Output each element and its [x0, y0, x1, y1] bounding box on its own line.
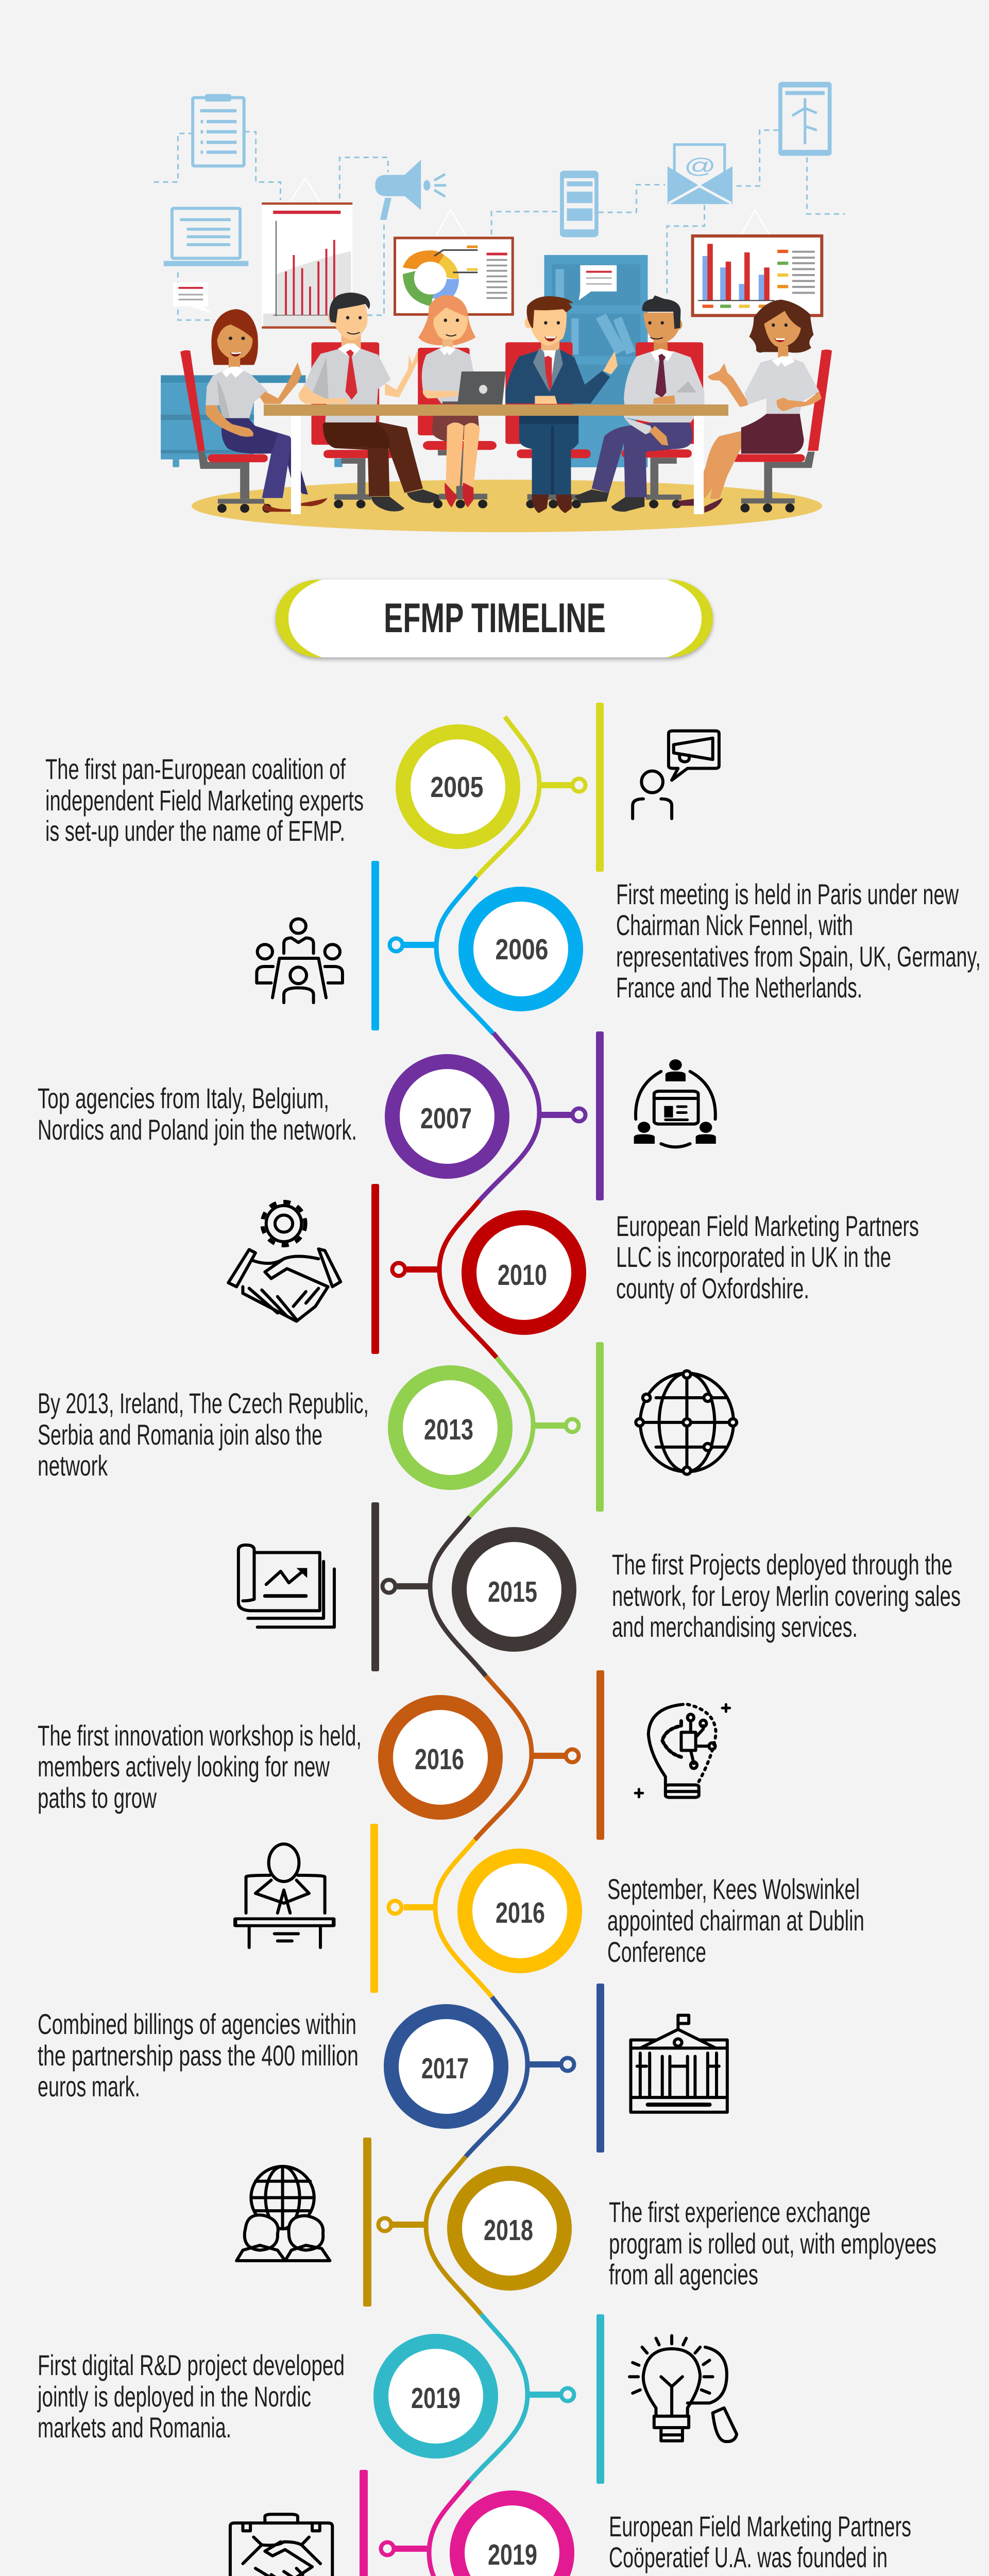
- text: 2017: the partnership pass the 400 million: [38, 2039, 359, 2072]
- laptop: [442, 371, 506, 404]
- text: 2018: The first experience exchange: [609, 2196, 871, 2228]
- text: 2015: [612, 1548, 961, 1643]
- chair: woman with orange hair: [418, 348, 497, 509]
- person: woman on left: [206, 309, 328, 512]
- text: 2016 chairman: Conference: [607, 1936, 706, 1968]
- text: 2019 R&D: First digital R&D project developed: [38, 2349, 345, 2381]
- icon: email envelope: [668, 145, 732, 204]
- milestone 2007: 2007: [420, 1102, 472, 1135]
- icon: innovation bulb: [635, 1704, 730, 1798]
- text: 2017: euros mark.: [38, 2070, 140, 2103]
- milestone 2019 cooperative: 2019: [488, 2538, 537, 2571]
- text: 2007: Top agencies from Italy, Belgium,: [38, 1082, 329, 1114]
- text: 2013: Serbia and Romania join also the: [38, 1418, 322, 1451]
- text: 2013: [38, 1387, 369, 1482]
- text: 2016 chairman: appointed chairman at Dublin: [607, 1904, 864, 1937]
- milestone 2006: 2006: [496, 933, 548, 966]
- text: 2019 R&D: markets and Romania.: [38, 2411, 231, 2444]
- bookshelf: [544, 255, 647, 467]
- milestone 2016 chairman: [233, 1824, 864, 1997]
- yellow floor ellipse: [192, 480, 822, 532]
- chair: man in suit: [505, 342, 590, 509]
- text: 2016 workshop: [38, 1719, 362, 1814]
- text: 2016 chairman: September, Kees Wolswinkel: [607, 1873, 860, 1905]
- text: 2018: from all agencies: [609, 2258, 758, 2291]
- icon: laptop: [164, 208, 248, 266]
- text: 2017: Combined billings of agencies within: [38, 2008, 356, 2040]
- text: 2005: is set-up under the name of EFMP.: [45, 815, 345, 847]
- icon: clipboard: [193, 94, 244, 166]
- chair: man with dark tie: [622, 342, 703, 509]
- icon: online team: [634, 1059, 716, 1147]
- hero backdrop: icons and charts: [154, 82, 845, 467]
- milestone 2015: [238, 1502, 961, 1676]
- text: 2016 workshop: The first innovation workshop is held,: [38, 1719, 362, 1752]
- text: 2016 workshop: members actively looking for new: [38, 1750, 330, 1783]
- icon: briefcase handshake: [230, 2514, 332, 2576]
- milestone 2005: [45, 703, 719, 877]
- milestone 2007: [38, 1031, 716, 1200]
- text: 2007: [38, 1082, 357, 1146]
- icon: people under globe: [236, 2166, 330, 2261]
- chart board 1: [262, 202, 352, 329]
- person: man with red tie: [299, 293, 442, 512]
- right group of people: [505, 295, 832, 513]
- person: man with dark tie: [574, 295, 704, 512]
- text: 2017: [38, 2008, 359, 2103]
- text: 2005: The first pan-European coalition of: [45, 753, 346, 785]
- person: woman on right: [676, 300, 822, 513]
- milestone 2018: [236, 2138, 936, 2314]
- milestone 2013: 2013: [424, 1413, 473, 1446]
- text: 2010: [616, 1210, 919, 1304]
- text: 2006: Chairman Nick Fennel, with: [616, 909, 853, 941]
- floating connection lines: [154, 130, 845, 320]
- title pill: [276, 580, 713, 659]
- icon: email envelope: @: [684, 154, 716, 178]
- milestone 2015: 2015: [488, 1575, 537, 1608]
- milestone 2005: 2005: [431, 771, 483, 804]
- chair: left woman: [180, 350, 271, 513]
- donut chart board: [395, 238, 513, 314]
- icon: light bulb and magnifier: [629, 2335, 737, 2442]
- text: 2006: France and The Netherlands.: [616, 971, 862, 1004]
- icon: megaphone: [375, 160, 446, 220]
- milestone 2016 chairman: 2016: [496, 1896, 545, 1929]
- text: 2013: By 2013, Ireland, The Czech Republic,: [38, 1387, 369, 1419]
- icon: phone: [560, 171, 599, 238]
- text: 2005: [45, 753, 364, 847]
- milestone 2016 workshop: 2016: [415, 1743, 464, 1776]
- title text: EFMP TIMELINE: [384, 595, 606, 641]
- person: man in navy suit: [505, 296, 618, 513]
- milestone 2019 R&D: [37, 2314, 737, 2484]
- icon: institution building: [630, 2015, 727, 2112]
- milestone 2010: [228, 1184, 919, 1358]
- filing cabinet: [161, 375, 343, 467]
- chair: right woman: [732, 349, 832, 513]
- chair: man with red tie: [312, 342, 394, 509]
- icon: chairman at desk: [233, 1844, 335, 1947]
- meeting table: [264, 404, 728, 514]
- text: 2005: independent Field Marketing experts: [45, 784, 364, 817]
- milestone 2018: 2018: [484, 2214, 533, 2247]
- text: 2016 chairman: [607, 1873, 864, 1968]
- text: 2018: [609, 2196, 936, 2291]
- icon: gear and handshake: [228, 1202, 340, 1321]
- milestone 2016 workshop: [38, 1670, 730, 1840]
- speech bubbles: [173, 265, 617, 314]
- milestone 2019 cooperative: [230, 2470, 919, 2576]
- text: 2010: county of Oxfordshire.: [616, 1272, 809, 1304]
- text: 2019 R&D: [37, 2349, 345, 2444]
- hanging triangles: [291, 178, 770, 236]
- text: 2019 cooperative: [609, 2510, 919, 2576]
- text: 2006: [616, 878, 981, 1004]
- text: 2016 workshop: paths to grow: [38, 1782, 157, 1814]
- icon: meeting around table: [257, 919, 343, 1003]
- milestone 2010: 2010: [498, 1259, 547, 1292]
- text: 2019 R&D: jointly is deployed in the Nordic: [37, 2380, 311, 2413]
- milestone 2013: [38, 1342, 737, 1517]
- text: 2013: network: [38, 1449, 108, 1482]
- milestone 2017: [38, 1984, 727, 2157]
- hero illustration: team meeting: [154, 82, 845, 532]
- text: 2007: Nordics and Poland join the network.: [38, 1113, 357, 1146]
- bar chart board: [693, 236, 822, 315]
- icon: speaker with megaphone bubble: [633, 731, 719, 819]
- icon: tablet: [778, 82, 831, 156]
- left group of people: [161, 293, 506, 513]
- person: woman with orange hair: [418, 295, 506, 507]
- milestone 2006: [257, 861, 981, 1034]
- milestone 2019 R&D: 2019: [411, 2382, 461, 2415]
- icon: growth chart document: [238, 1545, 334, 1627]
- milestone 2017: 2017: [421, 2052, 469, 2085]
- icon: global network: [636, 1371, 737, 1475]
- text: 2015: and merchandising services.: [612, 1611, 858, 1643]
